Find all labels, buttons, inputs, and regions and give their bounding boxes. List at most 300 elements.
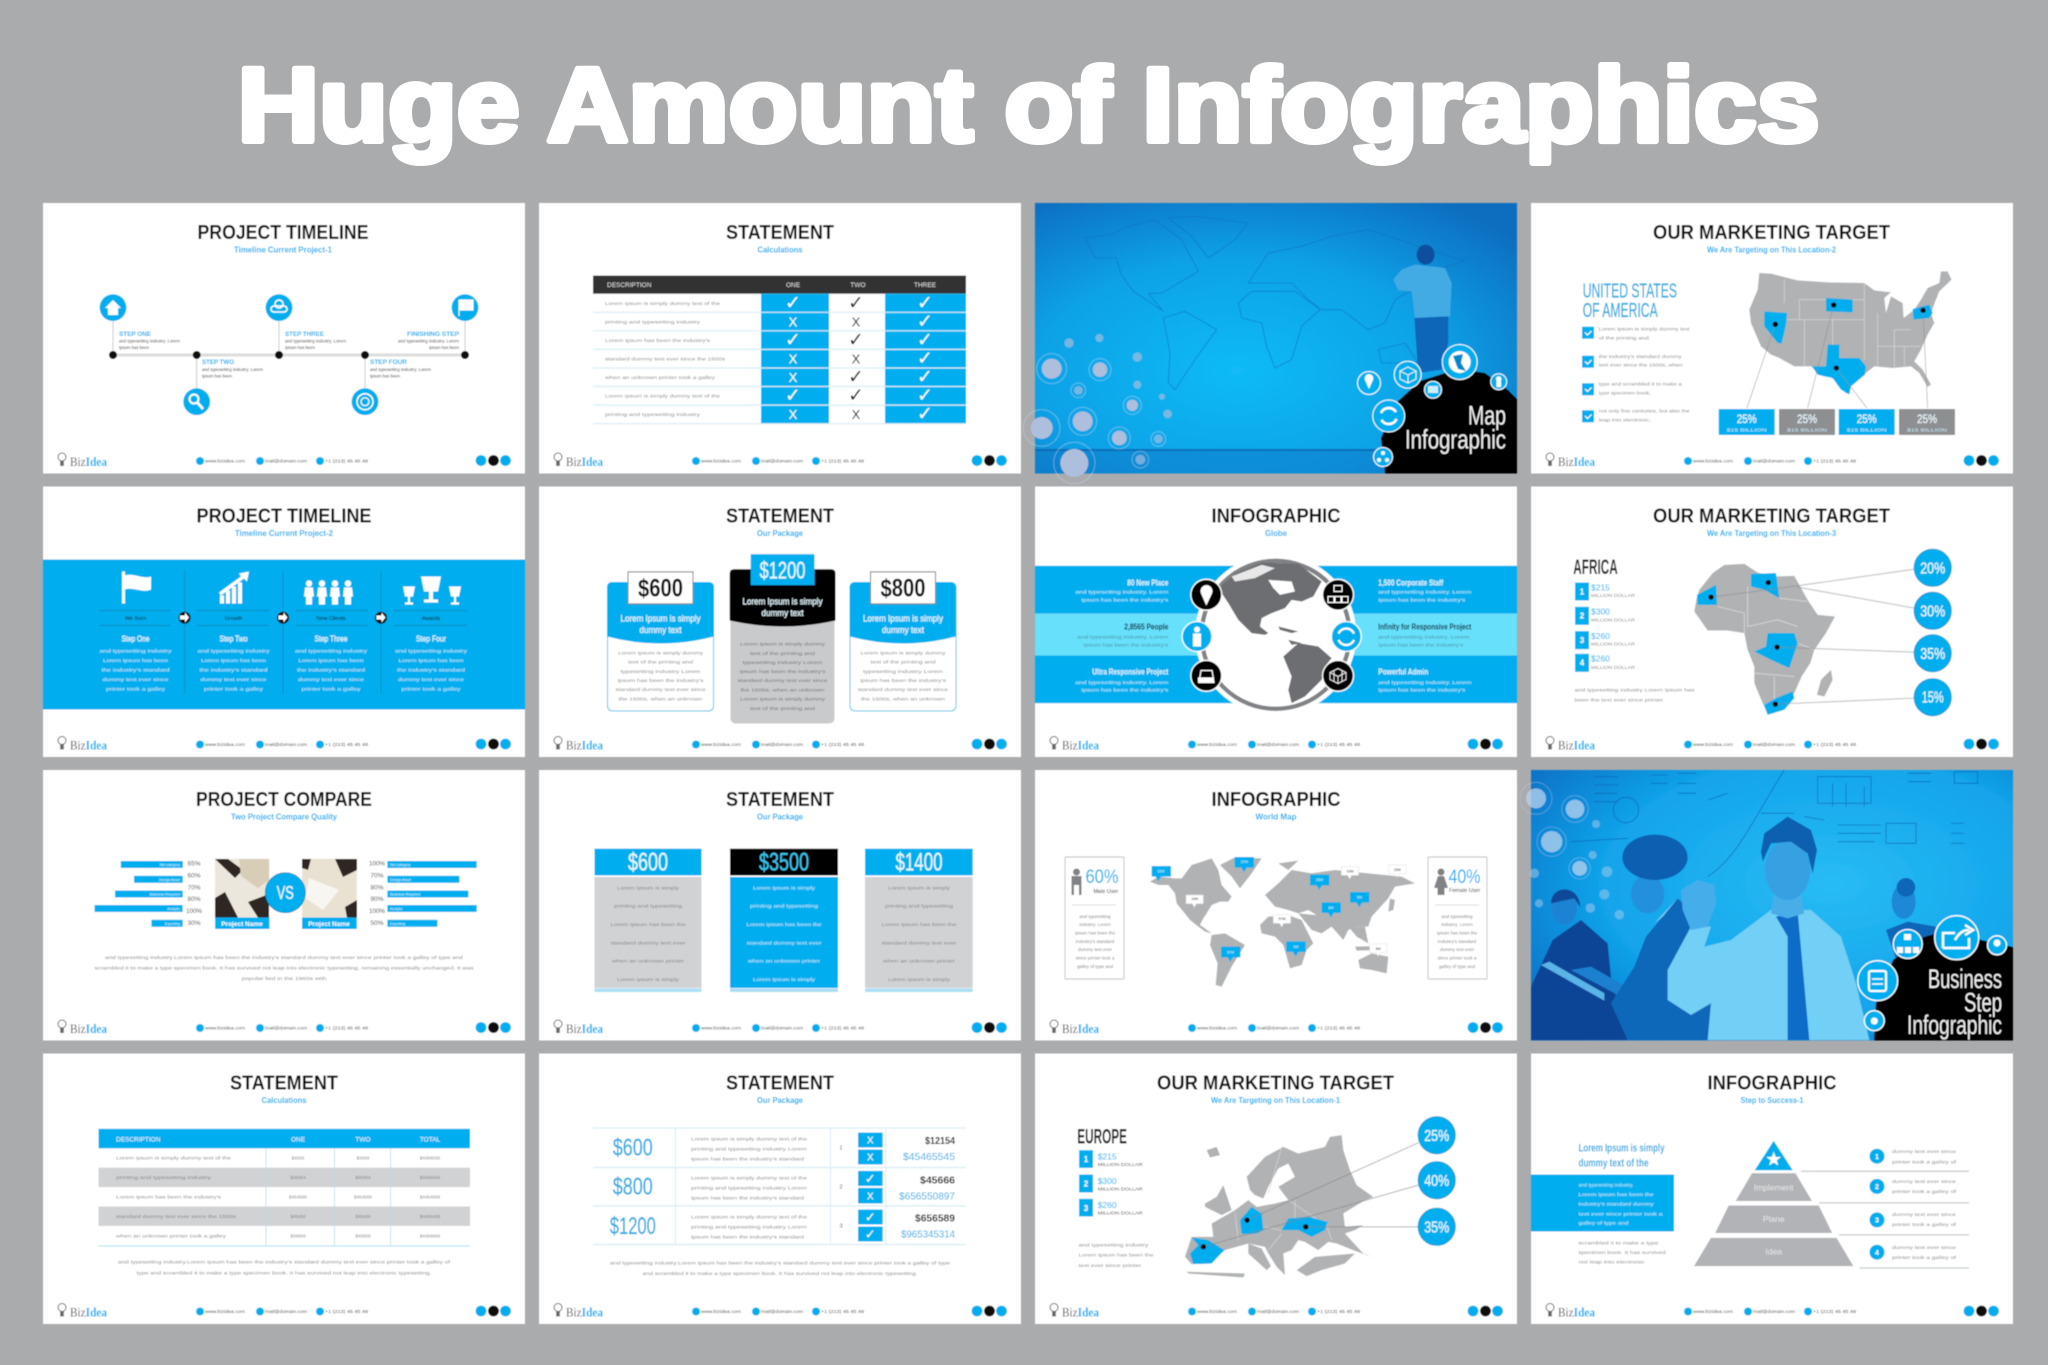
numbered list: dummy text ever since [1892,1149,1957,1154]
check table: ✓ [917,348,933,370]
check table: ✓ [785,384,801,406]
data table: ONE [291,1136,306,1144]
body text: and scrambled it to make a type specimen book. It has survived not leap into electronic typesetting. [642,1271,918,1276]
check table: Lorem Ipsum is simply dummy text of the [605,394,721,398]
check table: Lorem Ipsum is simply dummy text of the [605,301,721,306]
step labels: We Born [125,616,146,622]
male stat box: galley of type and [1077,964,1113,969]
footer [1546,453,1999,469]
slide grid [43,203,2013,1324]
data table: $45454 [355,1175,371,1180]
percent circles: 35% [1920,646,1945,663]
footer: BizIdea [70,738,107,752]
left band text [1075,578,1169,692]
check table: X [789,314,798,330]
photo right [302,859,357,929]
female stat box: galley of type and [1439,964,1475,969]
heading: OUR MARKETING TARGET [1653,504,1890,528]
check table: X [852,407,861,422]
subheading: Calculations [758,246,803,254]
footer: www.bizidea.com [701,742,741,747]
step text columns: printer took a galley [302,686,362,692]
VS badge: VS [277,883,294,903]
step labels: Awards [422,616,440,622]
data table: $4456656 [420,1234,441,1238]
data table: $45656 [290,1234,306,1238]
figures list: MILLION DOLLAR [1098,1210,1143,1216]
percent circles [1418,1116,1455,1246]
numbered list: 2 [1875,1184,1879,1191]
step text columns: Step Three [314,634,348,644]
footer: mail@domain.com [1257,1309,1299,1314]
panel: statement packages [539,486,1021,757]
heading: STATEMENT [726,504,834,528]
package: $800: dummy text [882,625,924,636]
check table: ✓ [917,384,933,406]
far left man [1531,889,1628,1040]
panel: infographic globe [1035,486,1517,757]
body text [118,1260,451,1276]
figures list: MILLION DOLLAR [1591,665,1636,670]
footer: www.bizidea.com [1693,1309,1733,1314]
price column $3500: Lorem Ipsum has been the [746,922,822,927]
map bubble labels: 57M [1241,860,1248,864]
step labels: Growth [225,616,242,622]
figures list: $260 [1591,654,1610,664]
icon: flag [122,572,151,604]
column dividers [185,570,381,694]
subheading: Our Package [757,1096,804,1105]
left bars [95,861,203,927]
package rows: Ipsum has been the industry's standard [691,1156,805,1162]
step text columns [100,634,468,692]
timeline: STEP THREE [285,332,324,338]
Europe map [1185,1135,1418,1277]
package: $600 [607,572,714,711]
step text columns: Step Two [220,634,248,644]
price column $1400: when an unknown printer [883,958,956,964]
left band text: 2,8565 People [1124,622,1169,632]
panel: map infographic photo [1023,203,1517,484]
footer: www.bizidea.com [205,742,245,747]
package rows: ✓ [865,1210,876,1226]
body text: type and scrambled it to make a type specimen book. It has survived not leap into electronic typesetting. [136,1270,432,1276]
step labels: New Clients [316,616,346,622]
price column $600 [594,848,702,992]
footer: +1 (213) 45 45 48 [1813,1309,1857,1314]
figures list: $300 [1098,1176,1117,1186]
figures list: 1 [1580,588,1585,596]
left band text: and typesetting industry. Lorem [1077,634,1169,640]
package: $800: the 1500s, when an unknown [861,696,946,702]
footer [554,1020,1007,1036]
panel: statement calculations table [43,1054,525,1324]
check table: TWO [850,282,866,289]
package rows: X [867,1136,874,1146]
step text columns: Lorem Ipsum has been [398,658,464,663]
left band text: 80 New Place [1127,578,1169,588]
figures list: $260 [1098,1200,1117,1210]
footer: +1 (213) 45 45 48 [1813,458,1857,464]
footer: www.bizidea.com [205,1309,245,1314]
left band text: Ipsum has been the industry's [1083,642,1169,648]
footer [1546,736,1999,752]
footer: mail@domain.com [265,742,307,747]
package: $1200: Lorem Ipsum is simply [742,596,823,608]
package: $600: Lorem Ipsum is simply dummy [618,650,704,656]
step text columns: dummy text ever since [102,677,169,682]
heading: STATEMENT [726,221,834,244]
female stat box: industry. Lorem [1441,922,1473,927]
price column $600: printing and typesetting [614,904,683,908]
package: $1200: text of the printing and [750,651,816,656]
subheading: We Are Targeting on This Location-1 [1211,1096,1341,1105]
numbered list [1801,1149,1969,1268]
price column $600: $600 [628,848,668,876]
footer: +1 (213) 45 45 48 [325,458,369,464]
main title: Huge Amount of Infographics [238,47,1819,164]
map bubble labels: 10M [1346,870,1354,874]
panel: statement table with ticks [539,203,1021,474]
footer: www.bizidea.com [701,458,741,464]
footer: www.bizidea.com [1693,458,1733,464]
right bars: 80% [370,885,384,891]
checklist: of the printing and [1599,336,1649,341]
panel: infographic world map [1035,770,1517,1040]
map bubble labels: 53M [1158,870,1164,874]
stat boxes: $15 BILLION [1847,428,1887,432]
stat boxes [1719,409,1955,435]
map bubble labels: 57M [1278,917,1286,921]
footer: BizIdea [1062,1304,1099,1320]
VS badge [265,873,305,913]
data table: $4456556 [420,1156,441,1160]
timeline: and typesetting industry. Lorem [119,338,180,344]
price column $3500: Lorem Ipsum is simply [753,977,816,982]
body text: and typesetting industry.Lorem Ipsum has been the industry's standard dummy text ever since printer took a galley of type [610,1260,951,1266]
body text: and typesetting industry.Lorem Ipsum has been the industry's standard dummy text ever since printer took a galley of type and [105,955,464,960]
business step label: Business [1928,964,2002,994]
right bars: Exporting [390,922,405,926]
photo right: Project Name [308,921,350,928]
stat boxes: $15 BILLION [1727,428,1767,432]
step text columns: the industry's standard [397,668,466,672]
footer: +1 (213) 45 45 48 [1813,742,1857,747]
footer: BizIdea [566,1021,603,1036]
right bars: 70% [370,873,384,879]
package: $600: dummy text [640,625,682,636]
check table: ✓ [917,403,933,425]
data table: Lorem Ipsum is simply dummy text of the [116,1156,232,1160]
decorative bubbles [1023,334,1172,484]
price column $1400: $1400 [896,848,942,876]
package rows: ✓ [865,1172,876,1187]
map infographic label [1405,401,1506,455]
right band text: Infinity for Responsive Project [1378,622,1472,632]
timeline: and typesetting industry. Lorem [202,367,263,372]
footer: BizIdea [1558,738,1595,752]
left callout: specimen book. It has survived [1578,1250,1666,1255]
female stat box: 40% [1448,866,1480,888]
step text columns: dummy text ever since [398,677,465,682]
step text columns: dummy text ever since [298,677,365,682]
step text columns: the industry's standard [200,668,268,672]
package: $1200: the 1500s, when an unknown [740,688,825,692]
numbered list: printer took a galley of [1892,1160,1957,1164]
footer: mail@domain.com [761,458,803,464]
footer: BizIdea [70,1304,107,1320]
footer: BizIdea [566,1304,603,1320]
price column $1400: printing and typesetting [885,904,954,908]
package: $600: typesetting industry Lorem [620,669,701,674]
black corner shape [1381,369,1517,474]
body text [610,1260,951,1276]
package rows: Ipsum has been the industry's standard [691,1234,805,1240]
package rows: printing and typesetting industry Lorem [691,1146,807,1152]
package: $800 [850,572,956,711]
stat boxes: 25% [1737,412,1757,426]
subheading: Our Package [757,812,804,822]
stat boxes: 25% [1857,412,1877,426]
footer: mail@domain.com [265,1026,307,1030]
footer: +1 (213) 45 45 48 [821,1309,865,1314]
left callout: not leap into electronic [1578,1260,1646,1264]
heading: OUR MARKETING TARGET [1653,221,1890,244]
figures list: MILLION DOLLAR [1098,1186,1143,1192]
check table: ✓ [917,292,933,314]
footer: BizIdea [1558,454,1595,469]
check table: standard dummy text ever since the 1500s [605,356,726,362]
left band text: and typesetting industry. Lorem [1075,590,1169,594]
package rows: $12154 [925,1135,955,1147]
country name [1583,279,1677,322]
left band text: Ipsum has been the industry's [1081,598,1169,602]
check table: ✓ [785,329,801,351]
footer: mail@domain.com [761,742,803,747]
footer: mail@domain.com [1257,1026,1299,1030]
panel: marketing target USA [1531,203,2013,474]
data table: $4456456 [420,1214,441,1219]
numbered list: printer took a galley of [1892,1255,1957,1260]
footer: BizIdea [1558,1304,1595,1320]
left bars: Exporting [165,922,180,926]
package: $800: Lorem Ipsum is simply dummy [860,650,946,656]
package rows: Lorem Ipsum is simply dummy text of the [691,1176,808,1180]
footer: +1 (213) 45 45 48 [821,742,865,747]
data table: $4456454 [420,1175,441,1180]
map bubble labels: 10M [1191,897,1198,901]
floor band [1035,449,1385,474]
step text columns: and typesetting industry [100,648,173,654]
figures list: MILLION DOLLAR [1098,1162,1143,1167]
package: $800: typesetting industry Lorem [863,669,943,674]
photo left: Project Name [221,921,263,928]
subheading: We Are Targeting on This Location-2 [1707,246,1837,254]
package: $1200: standard dummy text ever since [738,678,828,683]
male stat box [1065,857,1124,979]
left bars: 30% [188,921,201,927]
step text columns: printer took a galley [204,686,264,692]
footer [1050,1304,1503,1320]
right band text: and typesetting industry. Lorem [1378,590,1472,594]
left band text: Ultra Responsive Project [1092,668,1169,676]
check table: ✓ [917,329,933,351]
checklist: type and scrambled it to make a [1599,381,1682,386]
data table: $45456 [355,1214,371,1219]
figures list: $215 [1591,582,1610,592]
left bars: Net category [160,863,180,867]
timeline: Ipsum has been [202,374,232,378]
right bars: Design Asset [390,878,411,882]
world map [1150,857,1415,987]
heading: STATEMENT [726,788,834,811]
package: $1200: Ipsum has been the industry's [740,669,826,674]
timeline: and typesetting industry. Lorem [370,367,431,372]
icon: growth chart [219,572,249,604]
stat boxes: $15 BILLION [1907,428,1947,432]
package: $800: Lorem Ipsum is simply [863,614,943,624]
footer [1050,736,1503,752]
right bars: 100% [369,909,386,915]
left bars: Analytic [167,907,180,911]
step text columns: Lorem Ipsum has been [103,658,169,663]
footer [554,453,1007,469]
check table: THREE [914,282,937,289]
male stat box: 60% [1086,866,1118,888]
step text columns: Step Four [416,634,446,644]
icon: new clients [304,580,353,604]
heading: INFOGRAPHIC [1708,1072,1837,1094]
heading: STATEMENT [230,1072,338,1094]
footer: www.bizidea.com [1197,1309,1237,1314]
package: $800: standard dummy text ever since [858,687,949,692]
price column $3500: when an unknown printer [748,958,821,964]
heading: PROJECT TIMELINE [196,504,372,528]
timeline: Ipsum has been [429,345,459,350]
package rows [593,1128,966,1244]
left callout [1531,1142,1674,1264]
central man [1668,817,1869,1040]
man drawing on wall [1393,245,1452,373]
figures list: text ever since printer. [1078,1263,1142,1268]
check table: ✓ [848,366,864,388]
blue band [43,560,525,710]
pyramid [1694,1141,1853,1266]
timeline: and typesetting industry. Lorem [285,338,346,344]
data table: $454566 [289,1194,307,1200]
panel: project timeline 2 [43,486,525,757]
numbered list: 3 [1875,1218,1879,1225]
numbered list: 1 [1875,1154,1879,1161]
data table: $4454566 [420,1194,441,1200]
package: $600: Lorem Ipsum is simply [620,614,701,624]
figures list: 3 [1084,1204,1089,1213]
left callout: Lorem Ipsum is simply [1578,1142,1665,1154]
heading: PROJECT COMPARE [196,788,372,811]
map infographic label: Infographic [1405,425,1506,455]
price column $3500: standard dummy text ever [746,940,822,946]
right bars: 50% [370,921,384,927]
left bars: 60% [188,873,201,879]
footer: BizIdea [70,454,107,469]
footer: mail@domain.com [1257,742,1299,747]
right bars: 100% [369,861,386,867]
stat boxes: $15 BILLION [1787,428,1827,432]
icon cluster [1858,916,2006,1031]
figures list: been the text ever since printer. [1574,698,1664,702]
data table: standard dummy text ever since the 1500s [116,1214,237,1219]
footer [58,1304,511,1320]
step text columns: dummy text ever since [200,677,267,682]
stat boxes: 25% [1917,412,1937,426]
map bubble labels: 9M [1294,945,1298,949]
male stat box: and typesetting [1079,914,1111,919]
data table: $454566 [354,1194,372,1200]
check table: X [789,352,798,366]
left callout: scrambled it to make a type [1578,1240,1659,1246]
figures list [1078,1150,1154,1268]
figures list: 2 [1580,612,1585,620]
step text columns: the industry's standard [297,668,366,672]
body text: and typesetting industry.Lorem Ipsum has been the industry's standard dummy text ever since printer took a galley of [118,1260,451,1264]
woman [1886,878,1938,963]
left bars: 100% [186,909,203,915]
footer: www.bizidea.com [701,1026,741,1030]
footer [58,453,511,469]
region name: EUROPE [1077,1126,1127,1148]
Africa map [1694,564,1914,715]
body text [94,955,474,981]
figures list: 2 [1084,1180,1089,1188]
photo left [215,859,269,929]
package rows: Ipsum has been the industry's standard [691,1196,805,1200]
stat boxes: 25% [1797,412,1817,426]
country name: UNITED STATES [1583,279,1677,302]
check table: ✓ [917,310,933,332]
step text columns: and typesetting industry [395,648,468,654]
package rows: printing and typesetting industry Lorem [691,1186,807,1190]
data table: TOTAL [420,1136,441,1144]
heading: STATEMENT [726,1072,834,1094]
subheading: World Map [1256,812,1297,822]
timeline: STEP FOUR [370,360,408,366]
step labels [99,610,467,626]
package rows: $1200 [610,1213,656,1240]
subheading: Timeline Current Project-2 [235,529,334,538]
data table: $45456 [290,1214,306,1219]
right band text: 1,500 Corporate Staff [1378,578,1444,588]
check table: ✓ [848,329,864,351]
check table: printing and typesetting industry [605,412,701,417]
data table: $45656 [355,1234,371,1238]
data table: $4556 [357,1156,370,1160]
body text: scrambled it to make a type specimen book. It has survived not leap into electronic typesetting, remaining essentially unchanged. It was [94,966,474,970]
female stat box: and typesetting [1441,914,1473,919]
footer: +1 (213) 45 45 48 [1317,1026,1361,1030]
package: $600: Ipsum has been the industry's [618,678,704,683]
bands [1035,566,1517,703]
package rows: 1 [839,1146,843,1152]
female stat box: Female User [1449,888,1481,894]
panel: statement pricing columns [539,770,1021,1040]
figures list: MILLION DOLLAR [1591,642,1636,646]
package: $600: text of the printing and [628,660,694,664]
figures list: and typesetting industry [1078,1242,1149,1248]
footer: +1 (213) 45 45 48 [1317,742,1361,747]
left callout: Lorem Ipsum has been the [1578,1192,1654,1197]
business step label [1907,964,2002,1040]
price column $3500: $3500 [759,848,809,876]
